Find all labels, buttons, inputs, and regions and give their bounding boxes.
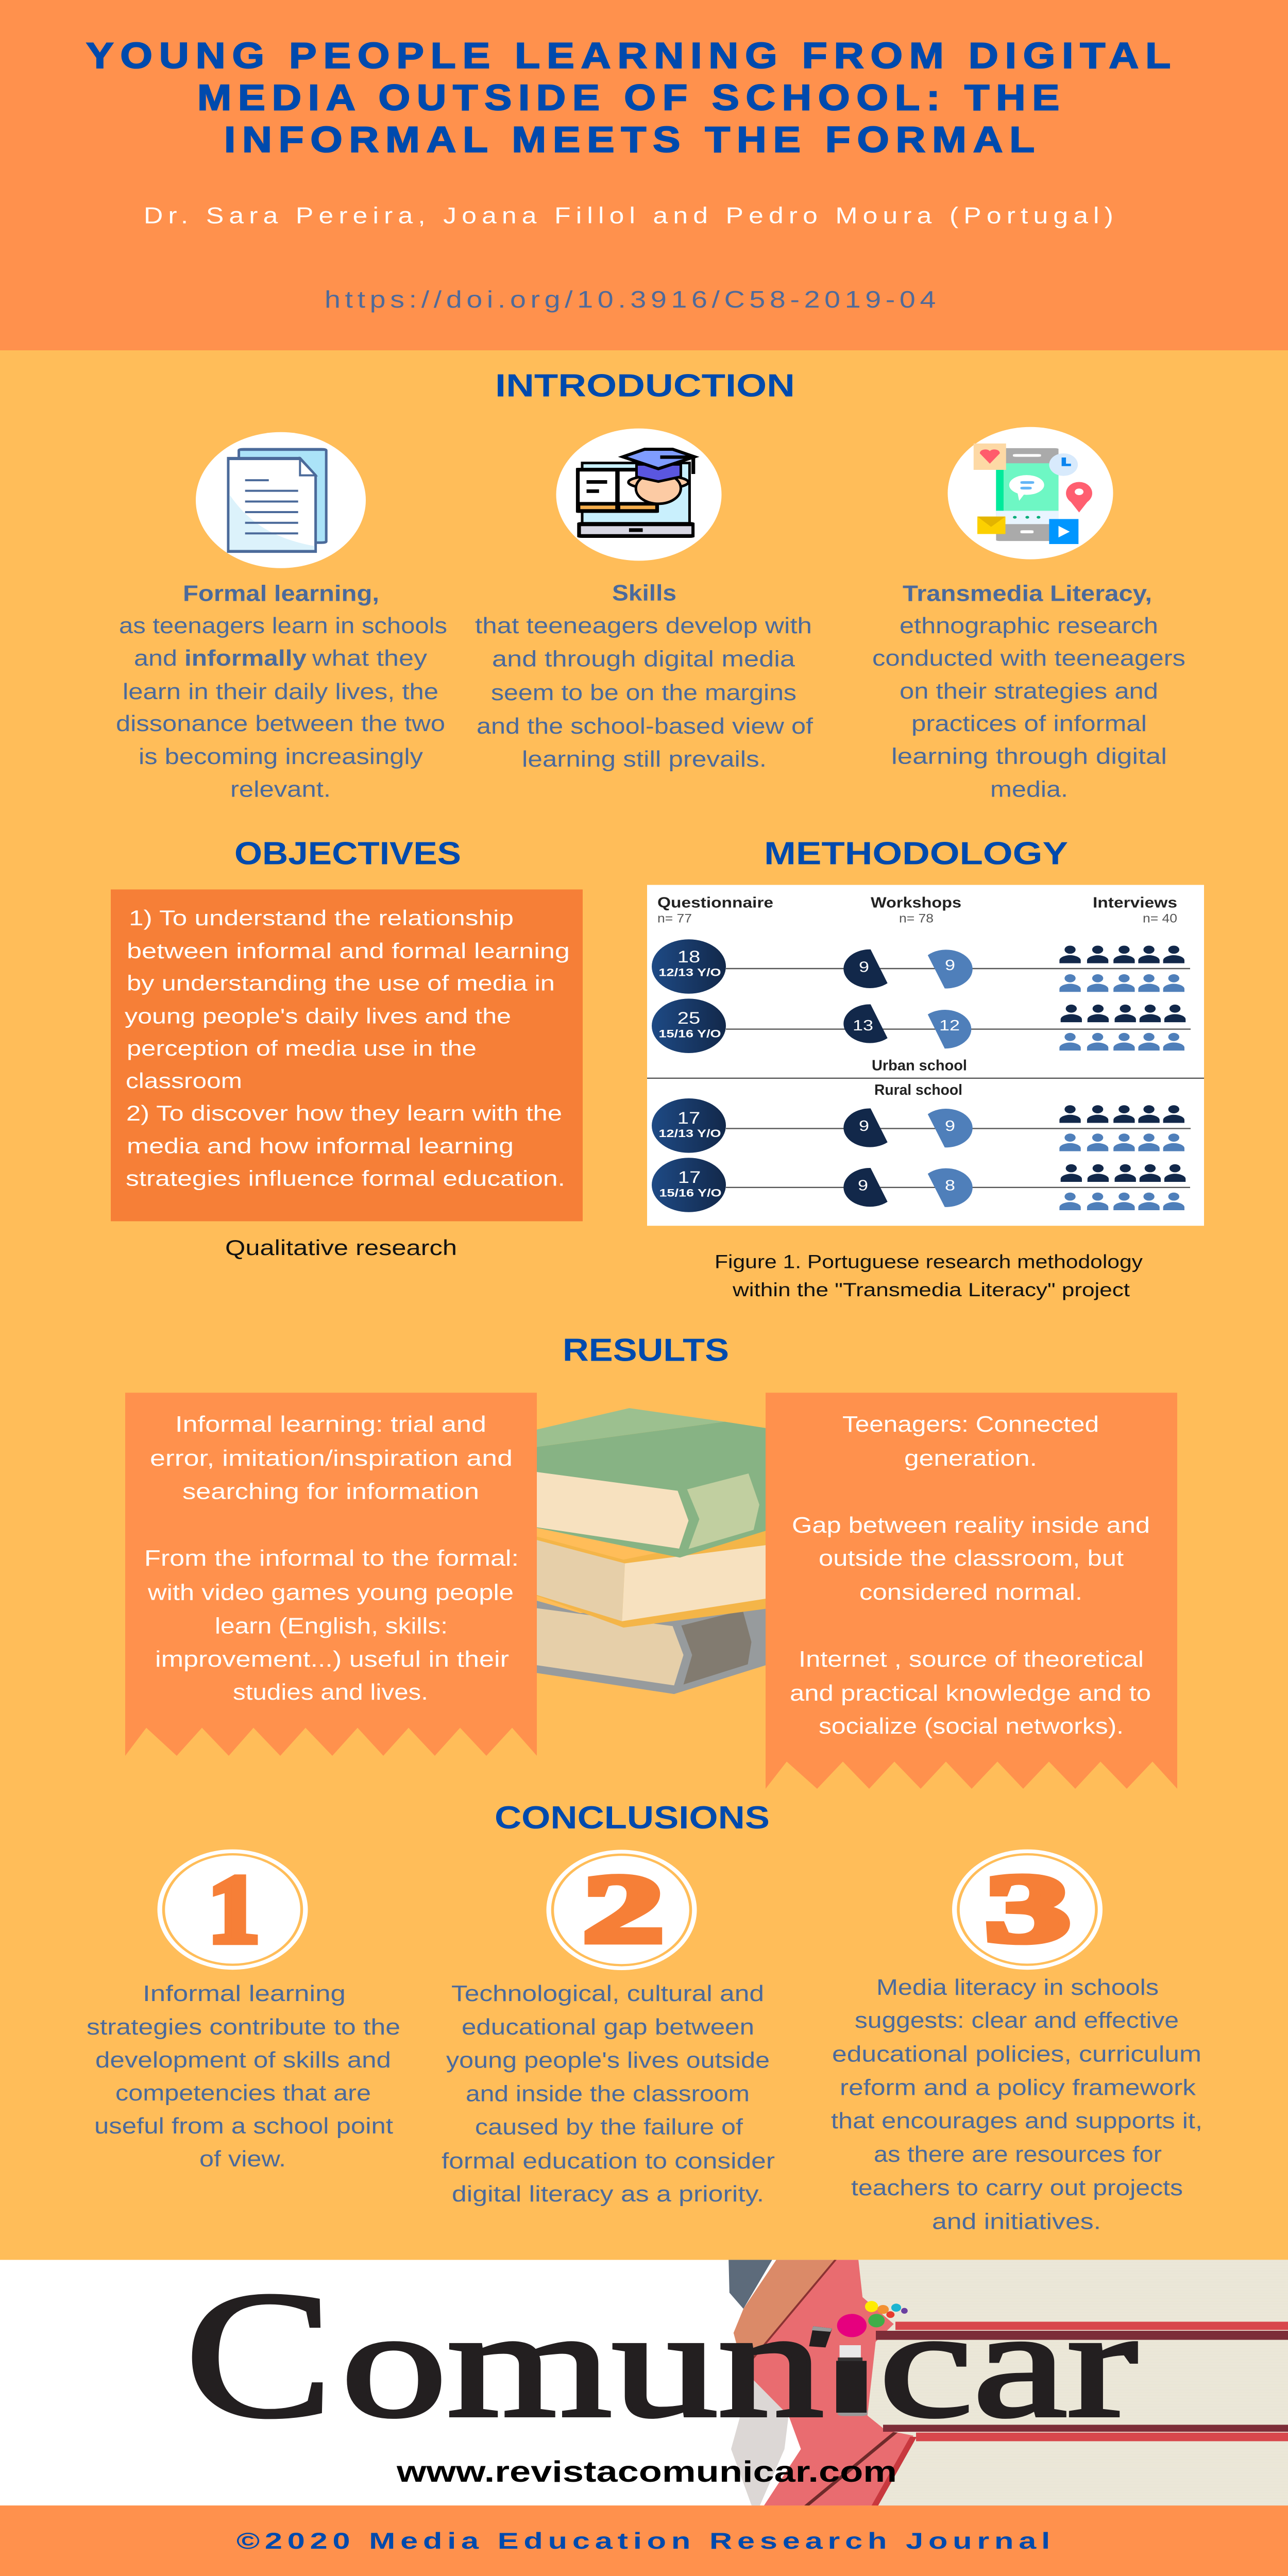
badge: number 3 (952, 1850, 1103, 1970)
text: formal learning: relevant. (230, 777, 331, 802)
figure caption: Figure 1. Portuguese research methodology (715, 1251, 1143, 1273)
column headers: n= 40 (1143, 911, 1177, 925)
text: conclusion 2: educational gap between (462, 2015, 754, 2040)
panel: objectives (111, 889, 583, 1221)
questionnaire circles: 17 (677, 1109, 700, 1127)
text: transmedia literacy: conducted with teeneagers (872, 646, 1185, 671)
text: formal learning: what they (312, 646, 428, 671)
footer text: ©2020 Media Education Research Journal (236, 2528, 1055, 2554)
workshop half circles: 9 (945, 1117, 955, 1134)
text: conclusion 2 (442, 1981, 775, 2207)
text: conclusion 1: strategies contribute to the (87, 2015, 400, 2040)
text: transmedia literacy: media. (990, 777, 1068, 802)
photo: stacked books (728, 2260, 1288, 2505)
text: conclusion 2: caused by the failure of (475, 2115, 743, 2140)
panel: results left ribbon: with video games young people (147, 1581, 514, 1605)
text: formal learning: informally (184, 646, 307, 671)
panel: results left ribbon: searching for information (182, 1480, 479, 1504)
text: conclusion 2: formal education to consider (442, 2149, 775, 2174)
workshop half circles: 9 (859, 958, 869, 975)
panel: results right ribbon: socialize (social networks). (819, 1714, 1124, 1739)
text: conclusion 1: Informal learning (143, 1981, 346, 2006)
website url: www.revistacomunicar.com (396, 2455, 897, 2488)
text: conclusion 2: Technological, cultural and (451, 1981, 764, 2006)
text: conclusion 3: Media literacy in schools (876, 1975, 1159, 2000)
questionnaire circles: 25 (677, 1009, 700, 1027)
panel: results left ribbon: improvement...) useful in their (155, 1647, 509, 1672)
doi link: https://doi.org/10.3916/C58-2019-04 (325, 286, 940, 313)
text: conclusion 3 (831, 1975, 1202, 2234)
logo: Comunicar wordmark (185, 2255, 1138, 2455)
icon: document (196, 432, 366, 568)
text: conclusion 1 (87, 1981, 400, 2172)
text: skills: Skills (612, 581, 676, 605)
panel: objectives: 2) To discover how they learn with the (126, 1101, 562, 1125)
text: transmedia literacy: practices of informal (911, 711, 1147, 736)
panel: objectives: strategies influence formal education. (126, 1166, 565, 1190)
column headers: n= 78 (899, 911, 934, 925)
badge: number 1 (158, 1850, 308, 1970)
text: conclusion 3: suggests: clear and effective (855, 2008, 1179, 2033)
heading: conclusions: CONCLUSIONS (495, 1799, 770, 1835)
workshop half circles: 9 (859, 1117, 869, 1134)
text: transmedia literacy: learning through digital (891, 744, 1167, 769)
workshop half circles: 13 (853, 1016, 873, 1033)
panel: results right ribbon: generation. (904, 1446, 1037, 1471)
text: conclusion 1: competencies that are (115, 2081, 371, 2106)
school labels: Rural school (874, 1081, 962, 1098)
questionnaire circles: 12/13 Y/O (658, 1128, 721, 1140)
questionnaire circles: 15/16 Y/O (659, 1187, 722, 1199)
figure caption (715, 1251, 1143, 1300)
title: YOUNG PEOPLE LEARNING FROM DIGITAL (86, 35, 1177, 76)
text: conclusion 3: reform and a policy framework (840, 2075, 1196, 2100)
text: formal learning: Formal learning, (183, 581, 379, 606)
questionnaire circles: 17 (678, 1168, 701, 1187)
panel: objectives: 1) To understand the relationship (129, 906, 514, 930)
workshop half circles: 9 (945, 957, 955, 973)
text: conclusion 3: educational policies, curriculum (832, 2042, 1201, 2066)
heading: results: RESULTS (563, 1332, 729, 1368)
title (86, 35, 1177, 160)
note: qualitative research: Qualitative research (225, 1235, 457, 1260)
heading: objectives: OBJECTIVES (234, 835, 461, 871)
panel: objectives: young people's daily lives and the (125, 1004, 511, 1028)
illustration: stack of books (537, 1408, 766, 1694)
logo: Comunicar wordmark: car (879, 2278, 1138, 2449)
text: skills: learning still prevails. (522, 747, 767, 772)
icon: graduate with laptop (556, 429, 721, 561)
title: MEDIA OUTSIDE OF SCHOOL: THE (197, 77, 1066, 118)
heading: introduction: INTRODUCTION (495, 367, 795, 403)
text: conclusion 3: that encourages and supports it, (831, 2109, 1202, 2133)
text: skills: and the school-based view of (477, 714, 813, 739)
text: transmedia literacy (872, 581, 1185, 802)
workshop half circles: 9 (858, 1177, 868, 1194)
badge: number 1: 1 (208, 1856, 260, 1963)
panel: objectives: perception of media use in the (127, 1036, 477, 1060)
text: transmedia literacy: ethnographic research (900, 614, 1158, 638)
text: formal learning: and (134, 646, 177, 671)
panel: results right ribbon: Teenagers: Connected (842, 1412, 1099, 1437)
panel: results left ribbon: Informal learning: trial and (175, 1412, 486, 1437)
panel: results right ribbon: Internet , source of theoretical (799, 1647, 1144, 1672)
text: formal learning: dissonance between the two (116, 711, 445, 736)
panel: results left ribbon: studies and lives. (233, 1680, 428, 1705)
panel: results right ribbon: and practical knowledge and to (790, 1681, 1151, 1706)
text: formal learning: as teenagers learn in schools (119, 614, 447, 638)
text: conclusion 1: development of skills and (95, 2048, 391, 2073)
footer band (0, 2505, 1288, 2576)
panel: results left ribbon: learn (English, skills: (215, 1614, 448, 1638)
questionnaire circles: 18 (677, 947, 700, 966)
panel: results left ribbon: From the informal to the formal: (144, 1546, 519, 1571)
school labels (872, 1057, 967, 1098)
text: conclusion 3: and initiatives. (932, 2209, 1101, 2234)
icon: USB stick letter i with colored dots (809, 2301, 908, 2416)
workshop half circles: 12 (939, 1016, 960, 1033)
icon: media apps phone (948, 427, 1113, 560)
panel: objectives: between informal and formal learning (127, 939, 570, 963)
questionnaire circles (652, 939, 726, 1212)
text: conclusion 2: young people's lives outside (446, 2048, 770, 2073)
badge: number 2: 2 (583, 1855, 664, 1963)
workshop half circles (843, 950, 973, 1207)
figure caption: within the "Transmedia Literacy" project (732, 1279, 1130, 1300)
chart: methodology figure (647, 885, 1204, 1226)
questionnaire circles: 15/16 Y/O (658, 1028, 721, 1040)
panel: results left ribbon (125, 1393, 537, 1756)
panel: objectives: by understanding the use of media in (127, 971, 555, 995)
text: formal learning: learn in their daily lives, the (123, 680, 438, 704)
school labels: Urban school (872, 1057, 967, 1074)
column headers: n= 77 (657, 911, 692, 925)
column headers (657, 894, 1177, 925)
panel: objectives: media and how informal learning (127, 1133, 514, 1158)
text: conclusion 1: of view. (199, 2147, 286, 2172)
text: conclusion 3: as there are resources for (874, 2142, 1162, 2167)
badge: number 2 (546, 1850, 697, 1970)
badge: number 3: 3 (986, 1855, 1070, 1962)
banner: journal logo over photo of books (0, 2255, 1288, 2505)
text: skills: seem to be on the margins (491, 681, 796, 705)
workshop half circles: 8 (945, 1177, 955, 1194)
column headers: Interviews (1093, 894, 1177, 911)
text: skills: and through digital media (492, 647, 795, 671)
text: formal learning: is becoming increasingly (139, 744, 423, 769)
questionnaire circles: 12/13 Y/O (658, 967, 721, 979)
text: skills: that teeneagers develop with (475, 614, 812, 638)
text: conclusion 2: and inside the classroom (466, 2081, 750, 2106)
text: conclusion 2: digital literacy as a priority. (452, 2182, 764, 2207)
authors: Dr. Sara Pereira, Joana Fillol and Pedro Moura (Portugal) (144, 202, 1118, 228)
text: conclusion 1: useful from a school point (94, 2114, 393, 2139)
title: INFORMAL MEETS THE FORMAL (224, 120, 1041, 160)
heading: methodology: METHODOLOGY (764, 835, 1068, 871)
text: transmedia literacy: Transmedia Literacy, (903, 581, 1152, 606)
logo: Comunicar wordmark: omun (341, 2278, 824, 2449)
column headers: Workshops (871, 894, 961, 911)
panel: results right ribbon: considered normal. (859, 1580, 1082, 1605)
interview people icons (1059, 945, 1185, 1210)
text: skills (475, 581, 813, 772)
column headers: Questionnaire (657, 894, 773, 911)
panel: results left ribbon: error, imitation/inspiration and (150, 1446, 513, 1471)
panel: results right ribbon: Gap between reality inside and (792, 1513, 1150, 1538)
panel: objectives: classroom (126, 1069, 242, 1093)
text: transmedia literacy: on their strategies and (900, 679, 1158, 704)
panel: results right ribbon (766, 1393, 1177, 1789)
logo: Comunicar wordmark: C (185, 2255, 333, 2455)
header band (0, 0, 1288, 350)
text: conclusion 3: teachers to carry out projects (851, 2176, 1183, 2200)
text: formal learning (116, 581, 447, 802)
panel: results right ribbon: outside the classroom, but (819, 1546, 1124, 1571)
